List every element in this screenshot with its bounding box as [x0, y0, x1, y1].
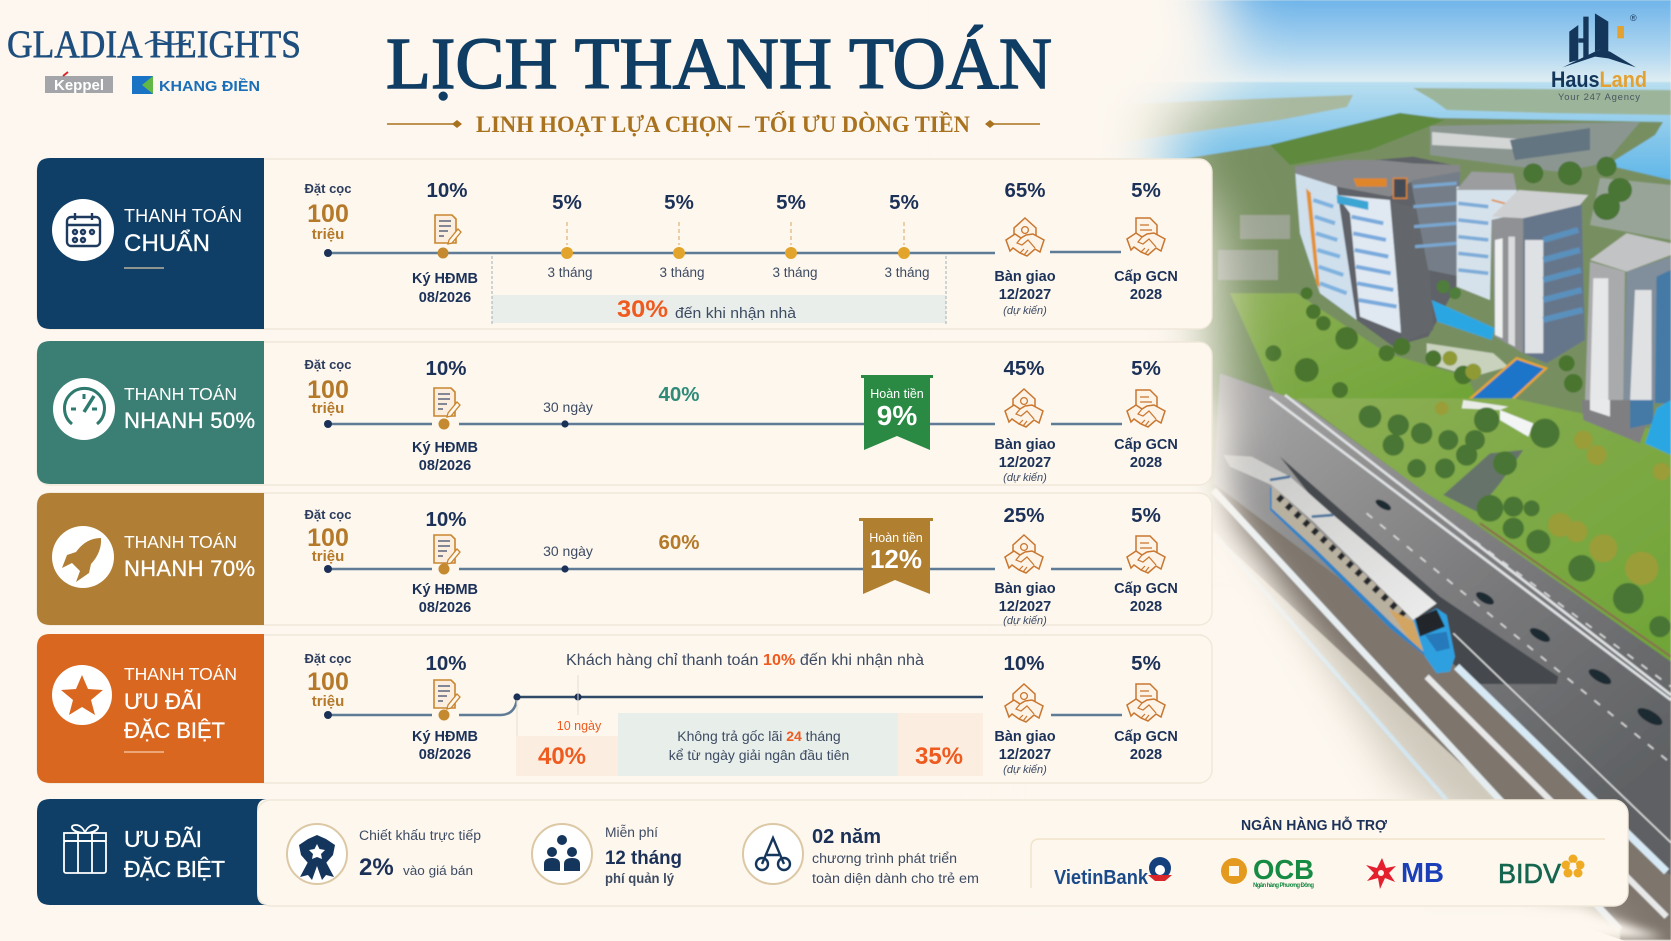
panel: uu dai dac biet: ĐẶC BIỆT	[124, 856, 225, 882]
panel: thanh toan nhanh 70%: 12/2027	[999, 599, 1051, 615]
panel: thanh toan nhanh 50%: THANH TOÁN	[124, 384, 237, 404]
panel: thanh toan chuan: 5%	[1131, 179, 1161, 202]
panel: thanh toan uu dai dac biet	[37, 634, 1212, 783]
logo: BIDV: BIDV	[1498, 858, 1561, 889]
panel: thanh toan uu dai dac biet: 35%	[915, 743, 963, 770]
panel: thanh toan chuan: 30%	[617, 296, 668, 323]
item: 02 nam chuong trinh tre em	[743, 824, 979, 886]
panel: thanh toan nhanh 50%: 45%	[1003, 357, 1045, 380]
panel: thanh toan uu dai dac biet: Bàn giao	[994, 729, 1056, 745]
panel: thanh toan nhanh 50%: 2028	[1130, 455, 1162, 471]
panel: thanh toan nhanh 50%: 40%	[658, 383, 700, 406]
panel: thanh toan nhanh 50%: Đặt cọc	[305, 357, 351, 372]
panel: thanh toan chuan: 5%	[889, 191, 919, 214]
panel: thanh toan nhanh 70%: 08/2026	[419, 600, 471, 616]
logo: VietinBank	[1054, 857, 1172, 889]
panel: thanh toan uu dai dac biet: Ký HĐMB	[412, 729, 478, 745]
panel: thanh toan nhanh 50%: 12/2027	[999, 455, 1051, 471]
panel: thanh toan chuan: 3 tháng	[547, 265, 593, 280]
ribbon: hoan tien 12%: 12%	[870, 544, 922, 574]
logo: Khang Dien	[132, 76, 260, 95]
logo: OCB: Ngân hàng Phương Đông	[1253, 883, 1314, 889]
panel: thanh toan nhanh 70%: (dự kiến)	[1003, 615, 1047, 627]
icon: gauge	[64, 388, 104, 424]
logo: Keppel: Keppel	[54, 77, 104, 94]
panel: thanh toan nhanh 70%: 2028	[1130, 599, 1162, 615]
logo: MB: MB	[1401, 857, 1444, 888]
panel: thanh toan chuan: 10%	[426, 179, 468, 202]
logo: Khang Dien: KHANG ĐIỀN	[159, 78, 260, 95]
panel: thanh toan chuan: Bàn giao	[994, 269, 1056, 285]
item: mien phi quan ly: Miễn phí	[605, 825, 658, 840]
logo: HausLand: Your 247 Agency	[1558, 92, 1640, 103]
panel: thanh toan chuan: Ký HĐMB	[412, 271, 478, 287]
panel: thanh toan nhanh 50%: 30 ngày	[543, 399, 593, 415]
logo: Gladia Heights: GLADIA HEIGHTS	[7, 23, 301, 66]
panel: thanh toan nhanh 50%: Ký HĐMB	[412, 440, 478, 456]
panel: thanh toan nhanh 70%: 100	[307, 524, 349, 552]
panel: thanh toan nhanh 70%	[37, 493, 1212, 627]
panel: thanh toan nhanh 50%: NHANH 50%	[124, 408, 255, 433]
panel: thanh toan uu dai dac biet: 5%	[1131, 652, 1161, 675]
panel: thanh toan chuan: 5%	[664, 191, 694, 214]
icon: calendar	[67, 213, 100, 246]
panel: thanh toan nhanh 70%: 5%	[1131, 504, 1161, 527]
hero photo: aerial view of towers, river, road and metro train	[1000, 0, 1671, 941]
logo: BIDV	[1498, 854, 1584, 889]
panel: thanh toan uu dai dac biet: ƯU ĐÃI	[124, 689, 202, 714]
ribbon: hoan tien 9%: 9%	[877, 400, 917, 431]
logo: MB	[1366, 857, 1444, 889]
panel: thanh toan uu dai dac biet: 2028	[1130, 747, 1162, 763]
panel: thanh toan nhanh 50%: 100	[307, 376, 349, 404]
panel: thanh toan uu dai dac biet: 12/2027	[999, 747, 1051, 763]
item: 02 nam chuong trinh tre em: toàn diện dành cho trẻ em	[812, 871, 979, 886]
panel: thanh toan nhanh 50%: Cấp GCN	[1114, 437, 1178, 453]
panel: thanh toan uu dai dac biet: Khách hàng chỉ thanh toán 10% đến khi nhận nhà	[566, 652, 924, 669]
panel: thanh toan nhanh 50%: (dự kiến)	[1003, 472, 1047, 484]
logo: HausLand: HausLand	[1551, 67, 1647, 92]
panel: thanh toan nhanh 70%: 30 ngày	[543, 543, 593, 559]
panel: thanh toan uu dai dac biet: Không trả gốc lãi 24 tháng	[677, 728, 841, 744]
panel: thanh toan chuan: Đặt cọc	[305, 181, 351, 196]
panel: thanh toan nhanh 70%: 10%	[425, 508, 467, 531]
item: mien phi quan ly	[532, 824, 682, 886]
panel: thanh toan chuan: 3 tháng	[772, 265, 818, 280]
icon: star	[61, 675, 103, 715]
panel: thanh toan nhanh 50%: 10%	[425, 357, 467, 380]
panel: thanh toan chuan: đến khi nhận nhà	[675, 306, 797, 322]
panel: thanh toan nhanh 70%: Bàn giao	[994, 581, 1056, 597]
panel: thanh toan chuan: triệu	[312, 226, 344, 243]
panel: thanh toan nhanh 50%: Bàn giao	[994, 437, 1056, 453]
panel: thanh toan nhanh 70%: 25%	[1003, 504, 1045, 527]
item: chiet khau 2%: vào giá bán	[403, 863, 473, 878]
panel: thanh toan uu dai dac biet: Đặt cọc	[305, 651, 351, 666]
logo: Keppel	[45, 72, 113, 94]
title: LỊCH THANH TOÁN	[386, 23, 1052, 104]
panel: uu dai dac biet	[37, 799, 1628, 906]
panel: thanh toan chuan: (dự kiến)	[1003, 305, 1047, 317]
icon: rocket	[62, 538, 101, 582]
panel: thanh toan uu dai dac biet: 10%	[1003, 652, 1045, 675]
panel: thanh toan nhanh 70%: Cấp GCN	[1114, 581, 1178, 597]
panel: thanh toan nhanh 70%: Đặt cọc	[305, 507, 351, 522]
item: mien phi quan ly: phí quản lý	[605, 871, 674, 886]
logo: VietinBank: VietinBank	[1054, 867, 1149, 889]
panel: thanh toan uu dai dac biet: 10 ngày	[557, 719, 602, 733]
panel: thanh toan uu dai dac biet: triệu	[312, 693, 344, 710]
panel: thanh toan nhanh 70%: THANH TOÁN	[124, 532, 237, 552]
panel: thanh toan nhanh 50%: 08/2026	[419, 458, 471, 474]
panel: thanh toan chuan: 100	[307, 200, 349, 228]
panel: uu dai dac biet: ƯU ĐÃI	[124, 826, 202, 852]
panel: thanh toan nhanh 50%	[37, 341, 1212, 485]
logo: OCB	[1221, 854, 1314, 889]
panel: thanh toan nhanh 50%: 5%	[1131, 357, 1161, 380]
panel: thanh toan uu dai dac biet: Cấp GCN	[1114, 729, 1178, 745]
panel: thanh toan nhanh 70%: Ký HĐMB	[412, 582, 478, 598]
panel: thanh toan nhanh 70%: 60%	[658, 531, 700, 554]
subtitle with ornaments: LINH HOẠT LỰA CHỌN – TỐI ƯU DÒNG TIỀN	[476, 111, 970, 137]
logo: HausLand	[1551, 13, 1647, 103]
ribbon: hoan tien 12%: Hoàn tiền	[869, 531, 923, 545]
ribbon: hoan tien 9%	[861, 375, 933, 450]
panel: thanh toan chuan: 12/2027	[999, 287, 1051, 303]
panel: thanh toan nhanh 50%: triệu	[312, 400, 344, 417]
panel: thanh toan uu dai dac biet: 100	[307, 668, 349, 696]
heading: ngan hang ho tro: NGÂN HÀNG HỖ TRỢ	[1241, 816, 1388, 834]
panel: thanh toan chuan: Cấp GCN	[1114, 269, 1178, 285]
logo: HausLand: ®	[1630, 13, 1637, 23]
panel: thanh toan chuan: THANH TOÁN	[124, 206, 242, 226]
panel: thanh toan chuan	[37, 158, 1212, 329]
ribbon: hoan tien 9%: Hoàn tiền	[870, 387, 924, 401]
panel: thanh toan uu dai dac biet: 08/2026	[419, 747, 471, 763]
panel: thanh toan chuan: 5%	[776, 191, 806, 214]
panel: thanh toan uu dai dac biet: THANH TOÁN	[124, 664, 237, 684]
panel: thanh toan uu dai dac biet: 40%	[538, 743, 586, 770]
panel: thanh toan uu dai dac biet: ĐẶC BIỆT	[124, 718, 225, 743]
item: chiet khau 2%	[287, 824, 481, 884]
panel: thanh toan chuan: 65%	[1004, 179, 1046, 202]
icon: gift	[64, 825, 106, 873]
panel: thanh toan chuan: CHUẨN	[124, 229, 210, 257]
panel: thanh toan chuan: 3 tháng	[884, 265, 930, 280]
panel: thanh toan nhanh 70%: triệu	[312, 548, 344, 565]
panel: thanh toan uu dai dac biet: (dự kiến)	[1003, 764, 1047, 776]
item: chiet khau 2%: Chiết khấu trực tiếp	[359, 828, 481, 843]
panel: thanh toan uu dai dac biet: 10%	[425, 652, 467, 675]
panel: thanh toan nhanh 70%: NHANH 70%	[124, 556, 255, 581]
item: 02 nam chuong trinh tre em: chương trình phát triển	[812, 851, 957, 866]
panel: thanh toan chuan: 2028	[1130, 287, 1162, 303]
panel: thanh toan chuan: 3 tháng	[659, 265, 705, 280]
item: mien phi quan ly: 12 tháng	[605, 848, 682, 869]
ribbon: hoan tien 12%	[859, 518, 933, 594]
panel: thanh toan uu dai dac biet: kể từ ngày giải ngân đầu tiên	[669, 747, 849, 763]
panel: thanh toan chuan: 08/2026	[419, 290, 471, 306]
logo: OCB: OCB	[1253, 854, 1314, 885]
panel: thanh toan chuan: 5%	[552, 191, 582, 214]
item: 02 nam chuong trinh tre em: 02 năm	[812, 826, 881, 848]
item: chiet khau 2%: 2%	[359, 854, 394, 881]
